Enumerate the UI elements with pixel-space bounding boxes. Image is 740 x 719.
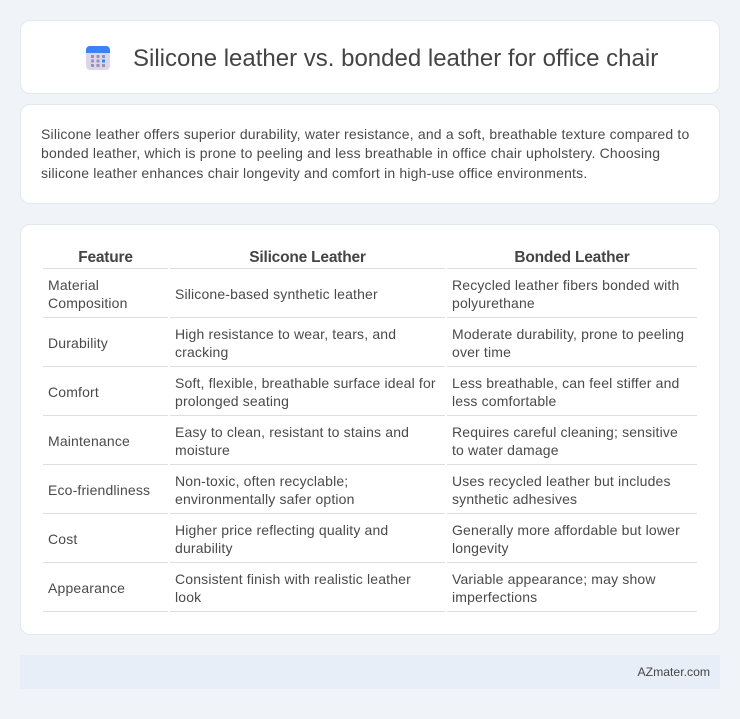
table header: feature: Feature [78,249,133,266]
row: eco-friendliness: Eco-friendliness [48,482,150,498]
text: Soft, flexible, breathable surface ideal for [175,375,436,391]
row: material composition: Material [48,277,99,293]
title text: Silicone leather vs. bonded leather for office chair [133,45,658,72]
row: cost: Cost [48,531,77,547]
panel: title [20,20,720,94]
table header: bonded leather: Bonded Leather [514,249,630,266]
text: Variable appearance; may show [452,571,656,587]
text: Silicone-based synthetic leather [175,286,378,302]
icon: calendar [86,46,110,70]
text: prolonged seating [175,393,289,409]
summary text: Silicone leather offers superior durability, water resistance, and a soft, breathable texture compared to [41,126,689,142]
text: High resistance to wear, tears, and [175,326,396,342]
text: less comfortable [452,393,556,409]
text: Less breathable, can feel stiffer and [452,375,679,391]
footer credit: AZmater.com [638,665,710,679]
row: material composition: Composition [48,295,128,311]
text: moisture [175,442,230,458]
footer [20,655,720,689]
text: Requires careful cleaning; sensitive [452,424,678,440]
text: Generally more affordable but lower [452,522,680,538]
text: to water damage [452,442,559,458]
row: comfort: Comfort [48,384,99,400]
text: imperfections [452,589,537,605]
text: Moderate durability, prone to peeling [452,326,684,342]
table header: silicone leather: Silicone Leather [249,249,366,266]
row: maintenance: Maintenance [48,433,130,449]
text: durability [175,540,233,556]
summary text: silicone leather enhances chair longevity and comfort in high-use office environments. [41,165,587,181]
row: material composition [48,277,128,311]
summary text: bonded leather, which is prone to peeling and less breathable in office chair upholstery. Choosing [41,145,660,161]
text: Consistent finish with realistic leather [175,571,411,587]
summary text [41,126,689,181]
text: Easy to clean, resistant to stains and [175,424,409,440]
panel: summary [20,104,720,204]
text: cracking [175,344,228,360]
panel: comparison table [20,224,720,635]
text: longevity [452,540,509,556]
text: synthetic adhesives [452,491,577,507]
text: Higher price reflecting quality and [175,522,388,538]
row: appearance: Appearance [48,580,125,596]
text: over time [452,344,511,360]
row: durability: Durability [48,335,108,351]
text: Non-toxic, often recyclable; [175,473,348,489]
text: look [175,589,201,605]
text: environmentally safer option [175,491,355,507]
text: polyurethane [452,295,535,311]
text: Recycled leather fibers bonded with [452,277,679,293]
text: Uses recycled leather but includes [452,473,671,489]
